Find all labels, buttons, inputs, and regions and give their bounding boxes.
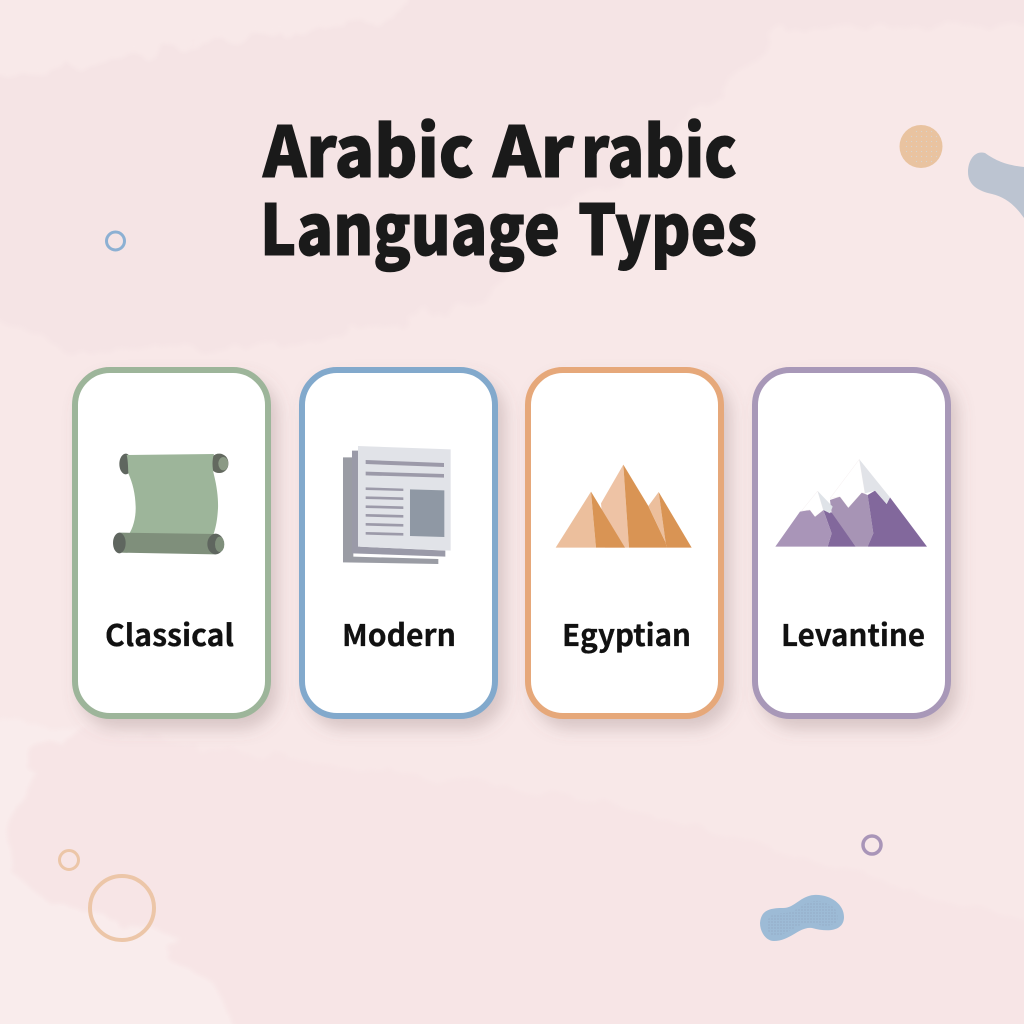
decoration: large orange ring [90,876,154,940]
label: Modern: Modern [342,611,456,655]
title: Types [578,175,757,276]
decoration: small orange ring [60,850,78,870]
icon: scroll [113,454,228,554]
label: Levantine: Levantine [781,611,925,655]
title: rabic [581,97,737,198]
title: Language [260,175,560,276]
title [260,97,757,276]
decoration: small blue ring [106,232,124,250]
title: Arabic [262,97,474,198]
label: Classical: Classical [105,611,234,655]
title: Ar [492,97,575,198]
panel: Levantine [755,370,948,716]
card frame: Levantine [755,370,948,716]
icon: newspaper [343,446,451,564]
decoration: blue-grey blob [968,152,1024,218]
decoration: small purple ring [863,836,881,854]
card frame: Classical [75,370,268,716]
panel: Modern [302,370,495,716]
card frame: Egyptian [528,370,721,716]
label: Egyptian: Egyptian [562,611,691,655]
decoration: blue blob [760,895,844,941]
decoration: orange circle [900,125,942,168]
card frame: Modern [302,370,495,716]
panel: Egyptian [528,370,721,716]
icon: pyramids [556,465,692,548]
icon: mountains [775,459,927,547]
panel: Classical [75,370,268,716]
